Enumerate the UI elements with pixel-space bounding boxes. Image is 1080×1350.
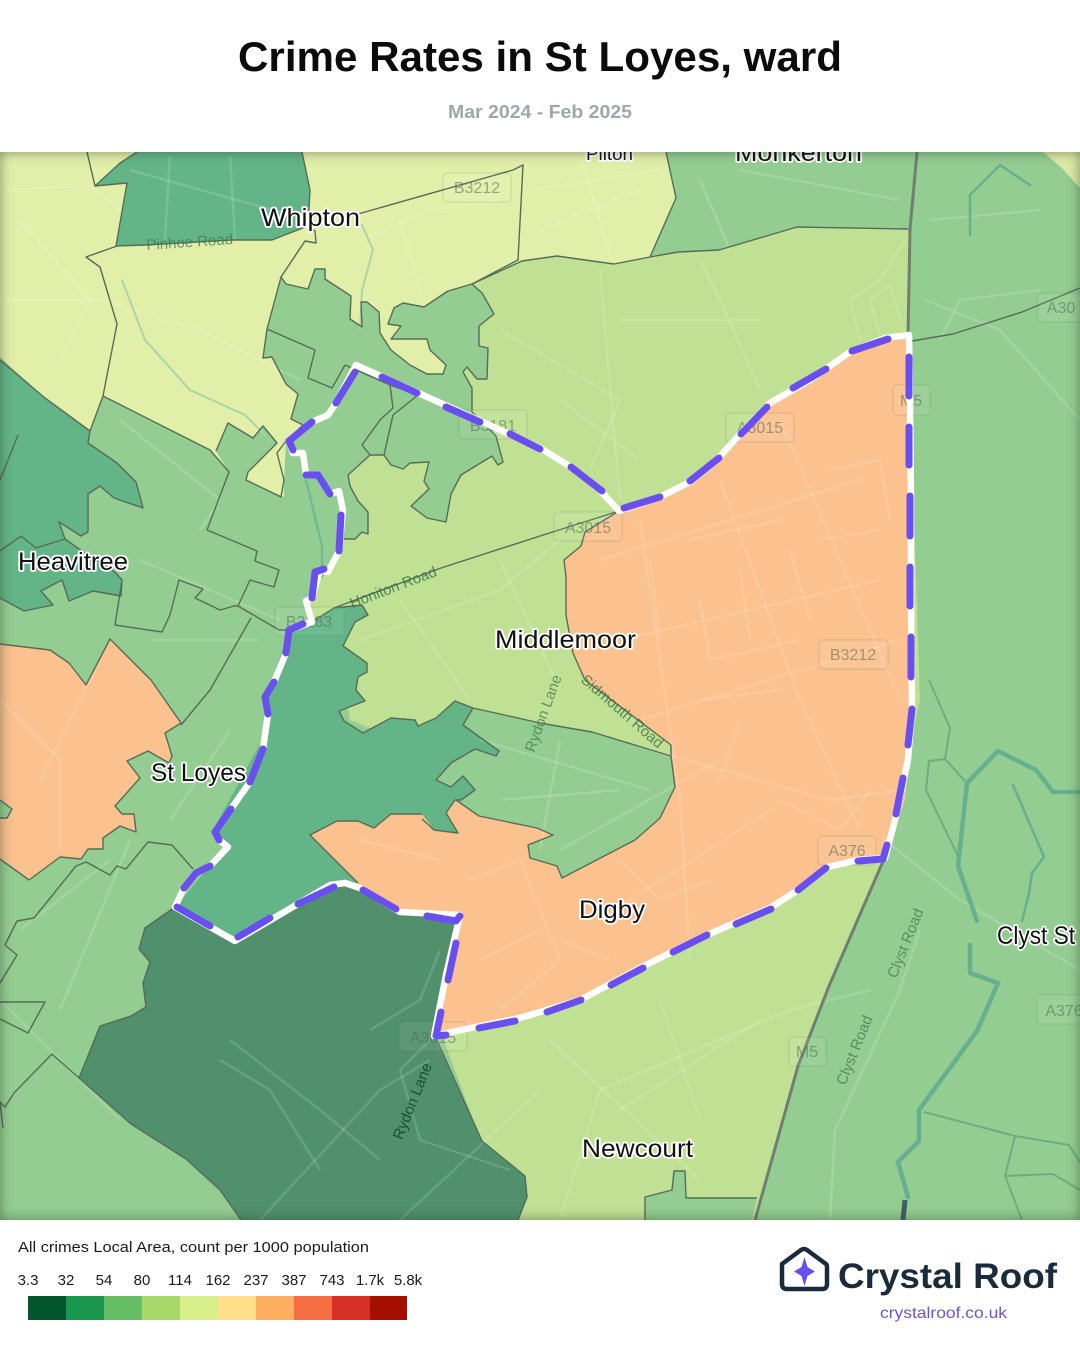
road name labels: Honiton Road (348, 563, 439, 612)
region: darkest green Ludwell valley (79, 883, 527, 1220)
road number shields: B3212 (830, 647, 876, 664)
river outfall (903, 1200, 905, 1220)
road number shields: A3015 (565, 520, 611, 537)
region: yellow northern wards (0, 152, 676, 497)
road number shields: A376 (828, 843, 866, 860)
place label: St Loyes: St Loyes (151, 759, 246, 787)
legend scale labels: 54 (96, 1272, 112, 1289)
legend scale labels (18, 1272, 422, 1289)
road number shields: B3183 (286, 614, 332, 631)
road name labels: Rydon Lane (390, 1061, 436, 1142)
title: Crime Rates in St Loyes, ward (238, 33, 842, 80)
brand url: crystalroof.co.uk (880, 1305, 1008, 1322)
region: orange Digby and Sowton (310, 335, 913, 1036)
road name labels: Pinhoe Road (146, 231, 234, 254)
region: Pinhoe darker green (95, 152, 310, 246)
legend scale labels: 743 (319, 1272, 345, 1289)
place label: Heavitree: Heavitree (18, 548, 128, 576)
faint road network (0, 155, 1080, 1220)
legend scale labels: 5.8k (394, 1272, 422, 1289)
region: mid green Whipton south blob (263, 269, 503, 622)
legend scale labels: 237 (243, 1272, 269, 1289)
legend scale labels: 1.7k (356, 1272, 384, 1289)
region: St Loyes central darker green (175, 605, 499, 941)
road number shields: M5 (900, 393, 922, 410)
legend colour bar (28, 1296, 407, 1320)
selected ward outline: St Loyes (175, 335, 912, 1036)
M5 motorway line (908, 152, 917, 335)
legend scale labels: 80 (134, 1272, 150, 1289)
legend title: All crimes Local Area, count per 1000 population (18, 1239, 369, 1256)
road name labels: Clyst Road (884, 906, 927, 981)
legend scale labels: 114 (168, 1272, 192, 1289)
region: yellow north-east corner (1043, 152, 1080, 188)
place label: Whipton: Whipton (261, 204, 360, 232)
region: light green Middlemoor and Newcourt (306, 227, 920, 1220)
M5 motorway line south (755, 859, 884, 1220)
legend scale labels: 387 (281, 1272, 307, 1289)
road name labels: Rydon Lane (522, 673, 566, 754)
region: mid green south of Sidmouth Road (436, 708, 675, 878)
brand name: Crystal Roof (838, 1257, 1057, 1296)
road name labels: Clyst Road (833, 1013, 876, 1088)
road number shields: B3212 (454, 180, 500, 197)
waterway lines (122, 165, 1080, 1197)
road number shields: A3015 (737, 420, 783, 437)
road number shields (275, 173, 1080, 1066)
road name labels: Sidmouth Road (577, 671, 667, 752)
place label: Digby: Digby (579, 896, 646, 924)
legend scale labels: 32 (58, 1272, 74, 1289)
region: St Loyes west orange (0, 639, 181, 880)
road number shields: A30 (1047, 300, 1075, 317)
region: Newcourt mid green inset (645, 1171, 757, 1220)
subtitle: date range: Mar 2024 - Feb 2025 (448, 102, 632, 122)
region: Heavitree darker green (0, 360, 143, 611)
icon: house with star (782, 1249, 827, 1289)
legend (18, 1239, 422, 1320)
choropleth map (0, 152, 1080, 1220)
road number shields: B3181 (470, 418, 516, 435)
ward boundary lines (0, 152, 1080, 1220)
brand logo (780, 1246, 1058, 1322)
place label: Middlemoor: Middlemoor (495, 626, 636, 654)
road name labels (146, 231, 927, 1142)
legend scale labels: 162 (205, 1272, 231, 1289)
region: base mid green (0, 152, 1080, 1220)
road number shields: M5 (796, 1044, 818, 1061)
legend scale labels: 3.3 (18, 1272, 38, 1289)
field boundary lines east (924, 680, 1080, 1220)
place label: Newcourt: Newcourt (582, 1135, 693, 1163)
road number shields: A3015 (410, 1030, 456, 1047)
